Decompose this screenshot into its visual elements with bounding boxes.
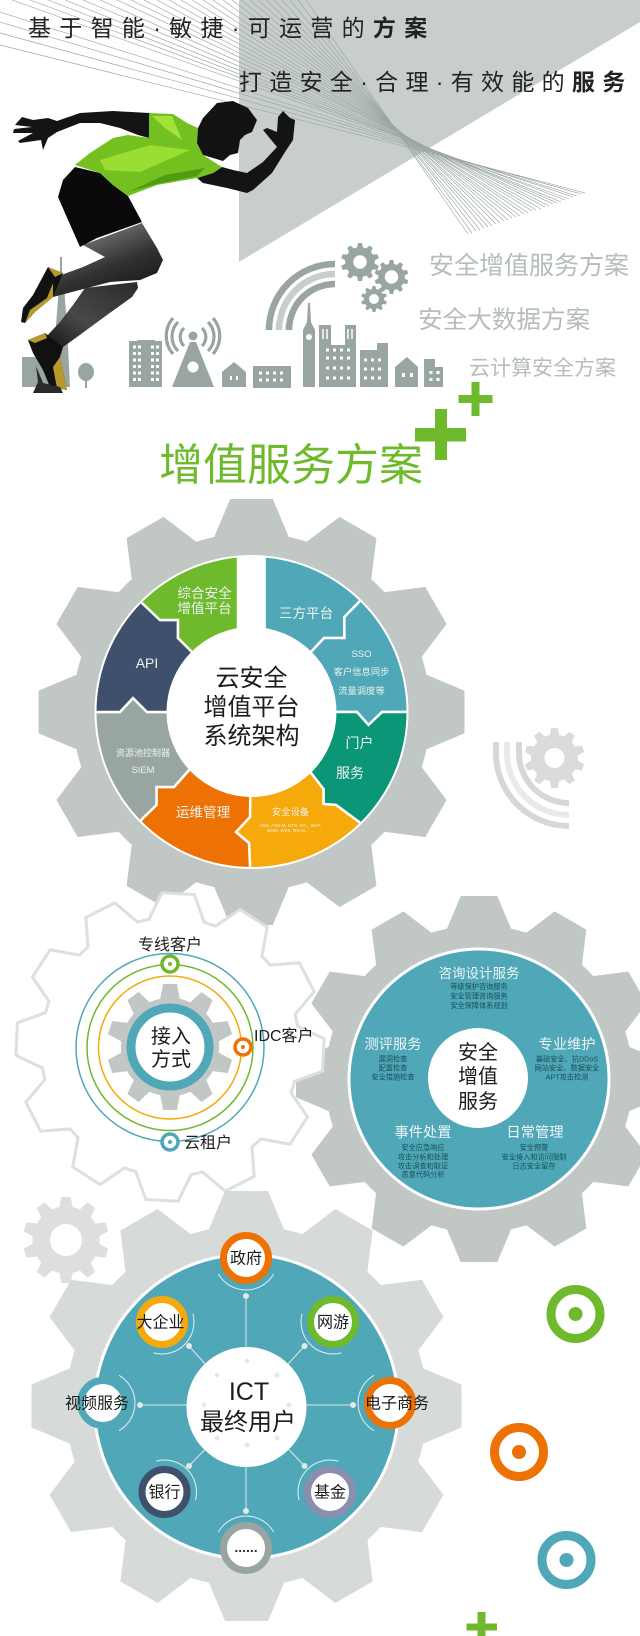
centre disc — [166, 627, 336, 797]
label: IDC customer: IDC客户 — [254, 1027, 314, 1045]
centre text: 系统架构 — [204, 723, 300, 750]
front arm and hand — [197, 111, 295, 193]
service: maintenance — [535, 1036, 600, 1082]
curved line ribbon — [0, 0, 585, 234]
segment labels: 综合安全 — [177, 585, 232, 601]
section heading: 增值服务方案 — [159, 441, 423, 490]
segment: API — [96, 602, 191, 714]
service: assessment — [364, 1036, 422, 1082]
node: others: ...... — [234, 1539, 258, 1555]
teal disc — [349, 949, 609, 1209]
centre disc — [186, 1347, 306, 1467]
service: maintenance: APT攻击检测 — [546, 1072, 588, 1082]
service: incident response: 攻击调查和取证 — [398, 1162, 448, 1170]
label: leased line customer: 专线客户 — [138, 936, 202, 954]
service: incident response: 事件处置 — [394, 1124, 452, 1141]
icon: flat building — [253, 366, 291, 388]
icon: castle building — [319, 325, 356, 387]
node: online games: 网游 — [317, 1314, 349, 1332]
gear body — [38, 499, 464, 925]
centre text: 增值 — [458, 1065, 498, 1088]
icon: house — [222, 362, 246, 387]
segment labels: SIEM — [131, 765, 155, 776]
service: incident response — [394, 1124, 452, 1179]
segment labels — [116, 585, 389, 834]
node: banks: 银行 — [148, 1484, 181, 1502]
service: maintenance: 基础安全、抗DDoS — [536, 1054, 598, 1064]
service: daily management — [502, 1124, 566, 1170]
gear body — [31, 1191, 461, 1621]
icon: small green plus — [458, 382, 492, 416]
segment: third party — [264, 558, 360, 651]
segment: portal — [312, 710, 406, 823]
service: assessment: 漏洞检查 — [379, 1054, 407, 1064]
service: assessment: 安全措施检查 — [371, 1072, 415, 1082]
panel: access methods gear — [10, 887, 330, 1207]
white stem — [238, 556, 264, 666]
centre text: 增值平台 — [204, 694, 300, 721]
node: funds: 基金 — [314, 1484, 346, 1502]
segment labels: 门户 — [346, 735, 374, 751]
centre dots — [202, 1358, 292, 1448]
icon: tree — [78, 363, 94, 388]
runner figure — [13, 101, 295, 393]
segment labels: HSS, ASS-M, NTS, ITA，WAF, — [260, 823, 321, 829]
front leg and shoe — [21, 223, 163, 323]
centre text: 服务 — [458, 1090, 498, 1113]
centre text: 最终用户 — [200, 1409, 296, 1436]
service: maintenance: 专业维护 — [538, 1036, 596, 1053]
panel: ICT end users gear — [31, 1191, 461, 1621]
segment labels: 安全设备 — [272, 806, 310, 817]
title line 2: 打造安全·合理·有效能的服务 — [239, 69, 633, 95]
centre text: 云安全 — [216, 665, 288, 692]
centre text: 安全 — [458, 1041, 498, 1064]
orbits — [76, 954, 264, 1142]
segment: integrated platform — [140, 558, 238, 652]
node: video services: 视频服务 — [65, 1394, 129, 1412]
segment: operations — [141, 770, 252, 867]
rear arm and hand — [13, 111, 149, 150]
service: daily management: 安全预警 — [520, 1143, 548, 1152]
right side caption: 安全增值服务方案: 安全增值服务方案 — [429, 252, 629, 280]
centre text — [200, 1378, 296, 1436]
service: assessment: 测评服务 — [364, 1036, 422, 1053]
rear leg and shoe — [28, 282, 138, 393]
ring segments — [96, 558, 406, 867]
segment labels: WSM, WSS, RSAS，… — [267, 828, 314, 834]
service: consulting: 安全管理咨询服务 — [450, 992, 508, 1000]
segment labels: 流量调度等 — [338, 685, 385, 696]
service: daily management: 安全接入和访问限制 — [502, 1152, 566, 1162]
centre text: ICT — [229, 1378, 269, 1406]
gear body — [296, 896, 640, 1262]
segment labels: 运维管理 — [176, 805, 231, 820]
shorts — [58, 167, 142, 247]
icon: signal tower — [166, 318, 220, 387]
segment: resource pool — [96, 700, 190, 822]
centre disc — [428, 1028, 528, 1128]
outline gear — [10, 887, 330, 1207]
node: e-commerce — [365, 1380, 429, 1426]
teal ring — [131, 1008, 209, 1086]
icon: small building — [424, 359, 443, 387]
service: assessment: 配置检查 — [379, 1064, 407, 1072]
title line 1: 基于智能·敏捷·可运营的方案 — [28, 15, 436, 41]
node: enterprise: 大企业 — [136, 1314, 185, 1332]
icon: distant tower and low building — [22, 257, 70, 387]
icon: pale gear with arcs — [496, 728, 585, 826]
background triangle — [239, 0, 640, 262]
segment labels: 资源池控制器 — [116, 747, 170, 758]
ring outline — [94, 555, 408, 869]
city skyline — [22, 257, 443, 388]
segment labels: SSO — [351, 649, 372, 660]
centre text: 方式 — [151, 1048, 191, 1071]
icon: clock tower — [303, 303, 315, 387]
segment: SSO — [310, 600, 406, 723]
node: government — [224, 1236, 268, 1280]
service: daily management: 日常管理 — [506, 1124, 564, 1141]
service: incident response: 攻击分析和处理 — [398, 1152, 448, 1162]
icon: three small gears — [341, 243, 409, 312]
node: teal — [162, 1134, 178, 1150]
node: banks — [142, 1470, 187, 1514]
panel: security value-added services gear — [296, 896, 640, 1262]
node arcs — [119, 1274, 374, 1532]
icon: teal target — [542, 1536, 591, 1584]
label: cloud tenant: 云租户 — [184, 1134, 232, 1152]
service: maintenance: 网站安全、数据安全 — [535, 1064, 600, 1072]
gear — [524, 728, 585, 788]
icon: pale small gear — [23, 1197, 109, 1283]
teal disc — [94, 1254, 398, 1558]
node: government: 政府 — [230, 1250, 262, 1268]
hub — [544, 748, 564, 768]
icon: signal arcs — [269, 264, 335, 330]
panel: platform architecture gear — [38, 499, 464, 925]
arcs — [496, 742, 569, 826]
service: consulting: 咨询设计服务 — [438, 966, 520, 981]
segment: security devices — [238, 772, 361, 867]
shirt — [75, 113, 222, 196]
service: consulting — [438, 966, 520, 1010]
node: orange — [235, 1039, 251, 1055]
node: green — [162, 956, 178, 972]
segment labels: 客户信息同步 — [334, 666, 389, 677]
icon: bottom green plus — [466, 1612, 497, 1636]
node: e-commerce: 电子商务 — [365, 1394, 429, 1412]
node: funds — [308, 1470, 352, 1514]
icon: twin building — [129, 340, 162, 387]
node: online games — [310, 1300, 356, 1344]
spokes — [138, 1294, 356, 1514]
segment labels: API — [136, 655, 158, 671]
service: daily management: 日志安全留存 — [512, 1162, 556, 1170]
icon: stepped building — [360, 343, 388, 387]
right side caption: 云计算安全方案: 云计算安全方案 — [469, 357, 616, 380]
right side caption: 安全大数据方案: 安全大数据方案 — [418, 306, 590, 334]
node: video services — [65, 1380, 129, 1426]
icon: green target — [551, 1290, 600, 1338]
centre text: 接入 — [151, 1025, 191, 1048]
segment labels: 服务 — [336, 765, 364, 781]
node: others — [224, 1526, 268, 1570]
service: incident response: 恶意代码分析 — [401, 1170, 445, 1179]
icon: big green plus — [415, 409, 466, 460]
service: consulting: 等级保护咨询服务 — [450, 982, 508, 991]
node: enterprise — [136, 1300, 185, 1344]
segment labels: 三方平台 — [279, 606, 333, 621]
icon: small house — [395, 357, 418, 387]
service: incident response: 安全应急响应 — [401, 1143, 445, 1152]
icon: orange target — [494, 1428, 544, 1476]
head — [197, 101, 257, 161]
service: consulting: 安全保障体系规划 — [450, 1001, 508, 1010]
segment labels: 增值平台 — [177, 601, 232, 616]
inner gear — [107, 984, 233, 1110]
